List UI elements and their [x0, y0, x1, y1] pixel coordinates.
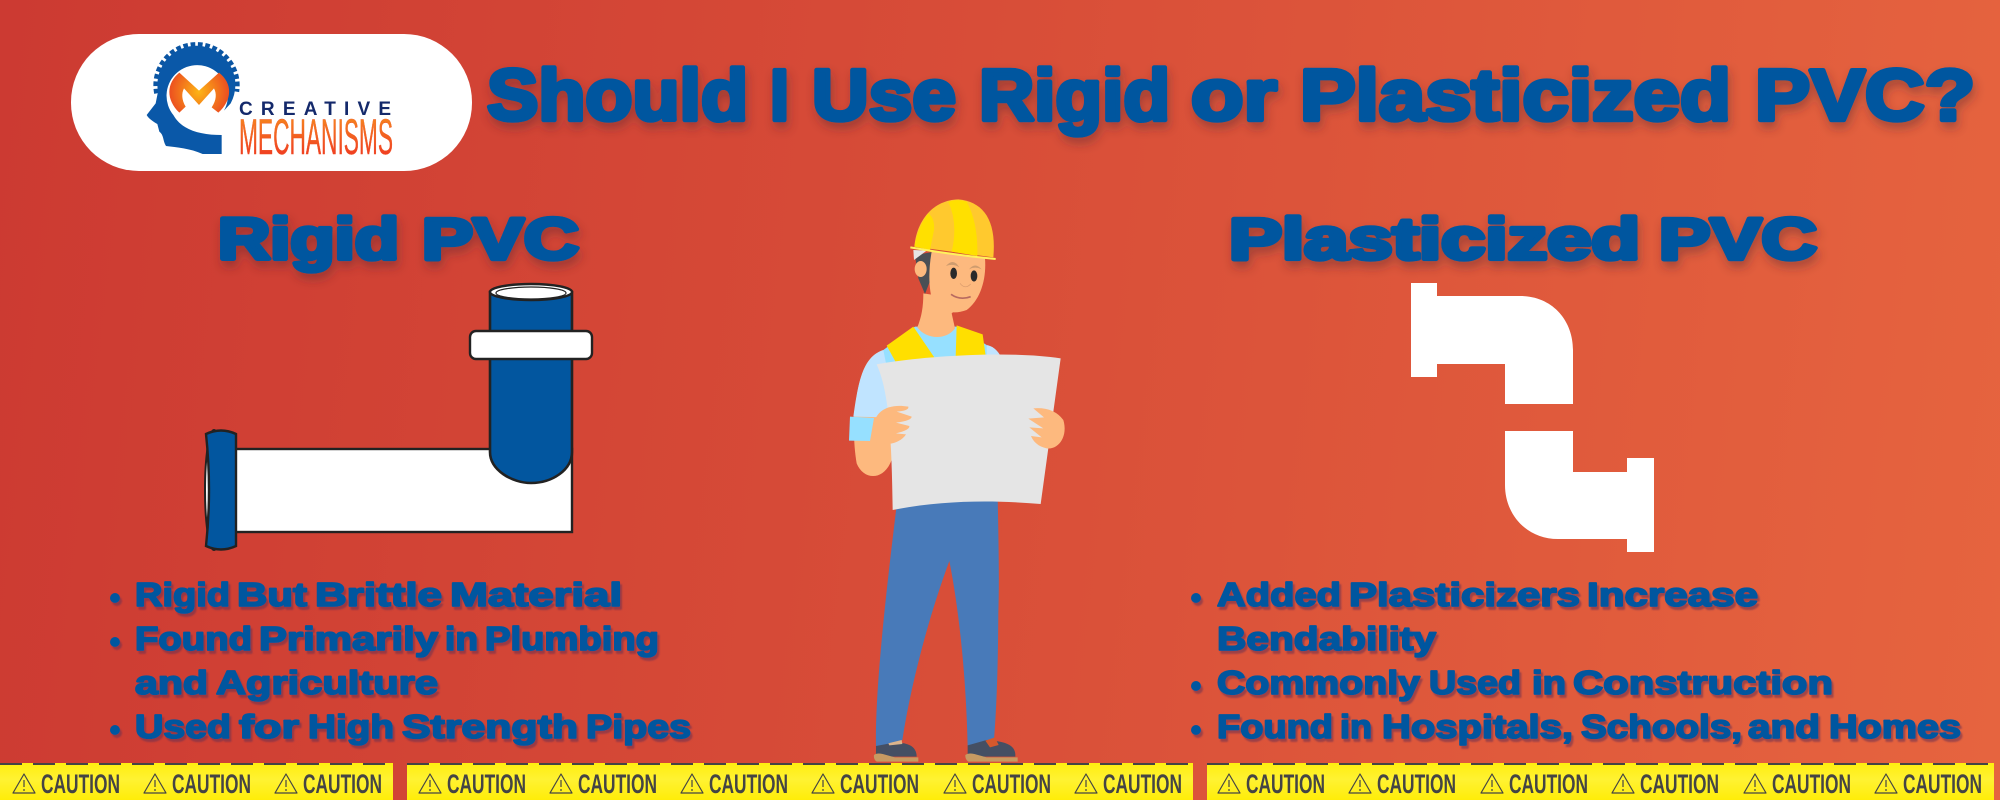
worker figure — [849, 199, 1065, 762]
logo wordmark: CREATIVE: CREATIVE — [239, 99, 391, 120]
caution tape: centre: CAUTION — [1103, 769, 1182, 799]
bullet list: plasticized PVC: in — [1340, 708, 1372, 745]
icon: plasticized pipes — [1411, 283, 1654, 552]
face — [929, 252, 985, 312]
title: I — [770, 56, 789, 136]
bullet list: rigid PVC: in — [445, 620, 478, 657]
caution tape: left: CAUTION — [172, 769, 251, 799]
vest — [887, 327, 935, 363]
bullet list: rigid PVC: But — [237, 576, 307, 613]
bullet list: rigid PVC: and — [135, 664, 208, 701]
bullet list: plasticized PVC: and — [1748, 708, 1820, 745]
bullet list: rigid PVC: Plumbing — [485, 620, 659, 657]
bullet list: rigid PVC: Strength — [402, 708, 578, 745]
title: PVC? — [1755, 56, 1975, 136]
bullet list: rigid PVC: for — [239, 708, 299, 745]
title: Use — [812, 56, 956, 136]
caution tape: right: CAUTION — [1640, 769, 1719, 799]
bullet list: plasticized PVC — [1191, 576, 1961, 745]
bullet list: plasticized PVC: Plasticizers — [1349, 576, 1580, 613]
caution tape: right: CAUTION — [1377, 769, 1456, 799]
blueprint paper — [877, 354, 1061, 510]
heading: Rigid PVC: PVC — [422, 207, 579, 272]
hard hat — [910, 199, 996, 259]
heading: Plasticized PVC: Plasticized — [1229, 207, 1640, 272]
arm left — [854, 350, 897, 476]
bullet list: rigid PVC: Pipes — [586, 708, 691, 745]
bullet list: plasticized PVC: Construction — [1573, 664, 1833, 701]
neck — [917, 293, 967, 337]
legs — [874, 497, 1018, 762]
bullet list: plasticized PVC: in — [1532, 664, 1566, 701]
shirt — [883, 327, 987, 367]
bullet list: plasticized PVC: Homes — [1829, 708, 1961, 745]
caution tape: centre: CAUTION — [840, 769, 919, 799]
caution tape: centre — [407, 763, 1193, 800]
bullet list: plasticized PVC: Increase — [1587, 576, 1758, 613]
title — [487, 56, 1975, 136]
bullet list: plasticized PVC: Used — [1429, 664, 1521, 701]
caution tape: left: CAUTION — [303, 769, 382, 799]
caution tape: right: CAUTION — [1246, 769, 1325, 799]
shoes — [874, 737, 1018, 762]
bullet list: plasticized PVC: Commonly — [1217, 664, 1421, 701]
title: Should — [487, 56, 748, 136]
bullet list: rigid PVC: Brittle — [315, 576, 442, 613]
title: or — [1191, 56, 1277, 136]
caution tape: right: CAUTION — [1772, 769, 1851, 799]
heading: Plasticized PVC: PVC — [1659, 207, 1817, 272]
bullet list: rigid PVC: Agriculture — [216, 664, 438, 701]
caution tape: centre: CAUTION — [578, 769, 657, 799]
caution tape: right — [1207, 763, 1994, 800]
icon: rigid pipe — [205, 284, 592, 550]
heading: Rigid PVC: Rigid — [218, 207, 399, 272]
bullet list: rigid PVC: Found — [135, 620, 252, 657]
bullet list: rigid PVC: High — [308, 708, 394, 745]
bullet list: rigid PVC: Rigid — [135, 576, 230, 613]
bullet list: rigid PVC: Material — [450, 576, 622, 613]
ear and hair — [915, 252, 935, 294]
bullet list: rigid PVC: Used — [135, 708, 231, 745]
caution tape: right: CAUTION — [1509, 769, 1588, 799]
upper body — [849, 199, 1065, 510]
bullet list: plasticized PVC: Found — [1217, 708, 1333, 745]
title: Plasticized — [1300, 56, 1731, 136]
bullet list: plasticized PVC: Schools, — [1581, 708, 1742, 745]
logo icon: head and gear — [147, 45, 237, 154]
caution tape: centre: CAUTION — [972, 769, 1051, 799]
title: Rigid — [979, 56, 1170, 136]
hands — [873, 406, 912, 444]
caution tape: left: CAUTION — [41, 769, 120, 799]
caution tape: centre: CAUTION — [447, 769, 526, 799]
heading: Plasticized PVC — [1229, 207, 1817, 272]
bullet list: plasticized PVC: Bendability — [1217, 620, 1437, 657]
caution tape: centre: CAUTION — [709, 769, 788, 799]
caution tape: left — [0, 763, 393, 800]
logo badge: MECHANISMS — [239, 109, 393, 165]
logo badge — [71, 34, 472, 171]
bullet list: plasticized PVC: Added — [1217, 576, 1341, 613]
heading: Rigid PVC — [218, 207, 579, 272]
bullet list: plasticized PVC: Hospitals, — [1382, 708, 1573, 745]
bullet list: rigid PVC — [110, 576, 691, 745]
bullet list: rigid PVC: Primarily — [259, 620, 439, 657]
